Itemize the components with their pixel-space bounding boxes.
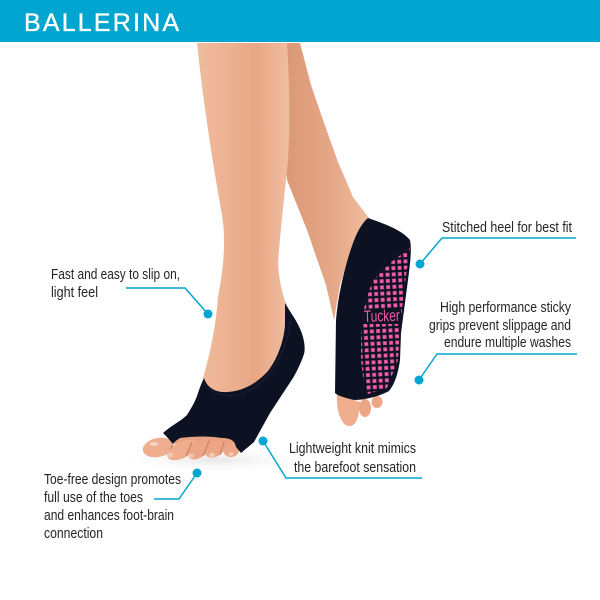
callout: sticky grips: endure multiple washes bbox=[444, 335, 571, 351]
front sock bbox=[163, 303, 305, 453]
toe separators bbox=[170, 441, 224, 456]
callout: sticky grips bbox=[414, 300, 577, 384]
sock cuff band bbox=[204, 318, 291, 396]
front leg bbox=[197, 43, 295, 398]
leader line bbox=[154, 473, 197, 499]
rear leg bbox=[280, 43, 369, 320]
grip dots bbox=[361, 248, 410, 394]
illustration: front leg and foot with sock bbox=[141, 43, 305, 465]
callout: toe-free: full use of the toes bbox=[44, 490, 143, 506]
toenails bbox=[150, 442, 158, 446]
header banner bbox=[0, 0, 600, 42]
callout: lightweight knit bbox=[258, 436, 422, 478]
callout text: Fast and easy to slip on, bbox=[51, 267, 180, 283]
rear foot toes bbox=[337, 394, 382, 426]
callout text: Toe-free design promotes bbox=[44, 472, 181, 488]
callout: stitched heel bbox=[416, 220, 576, 268]
callout: slip on: light feel bbox=[51, 285, 98, 301]
rear sock bbox=[335, 218, 411, 400]
brand lettering on sole: Tucker bbox=[364, 307, 400, 326]
leader line bbox=[420, 238, 576, 264]
illustration: rear leg and foot with grip sole bbox=[280, 43, 415, 426]
floor shadow bbox=[110, 447, 320, 473]
callout: toe-free bbox=[44, 468, 202, 542]
callout: slip on bbox=[51, 267, 212, 318]
callout: sticky grips: grips prevent slippage and bbox=[429, 318, 571, 334]
callout text: Lightweight knit mimics bbox=[289, 441, 416, 457]
title: BALLERINA bbox=[24, 9, 179, 37]
leader line bbox=[419, 354, 577, 380]
callout: toe-free: and enhances foot-brain bbox=[44, 508, 174, 524]
toes bbox=[141, 428, 239, 465]
callout text: High performance sticky bbox=[440, 300, 572, 316]
callout text: Stitched heel for best fit bbox=[442, 220, 572, 236]
leader line bbox=[126, 288, 208, 314]
callout: lightweight knit: the barefoot sensation bbox=[294, 460, 416, 476]
callout: toe-free: connection bbox=[44, 526, 103, 542]
leader line bbox=[263, 441, 422, 478]
